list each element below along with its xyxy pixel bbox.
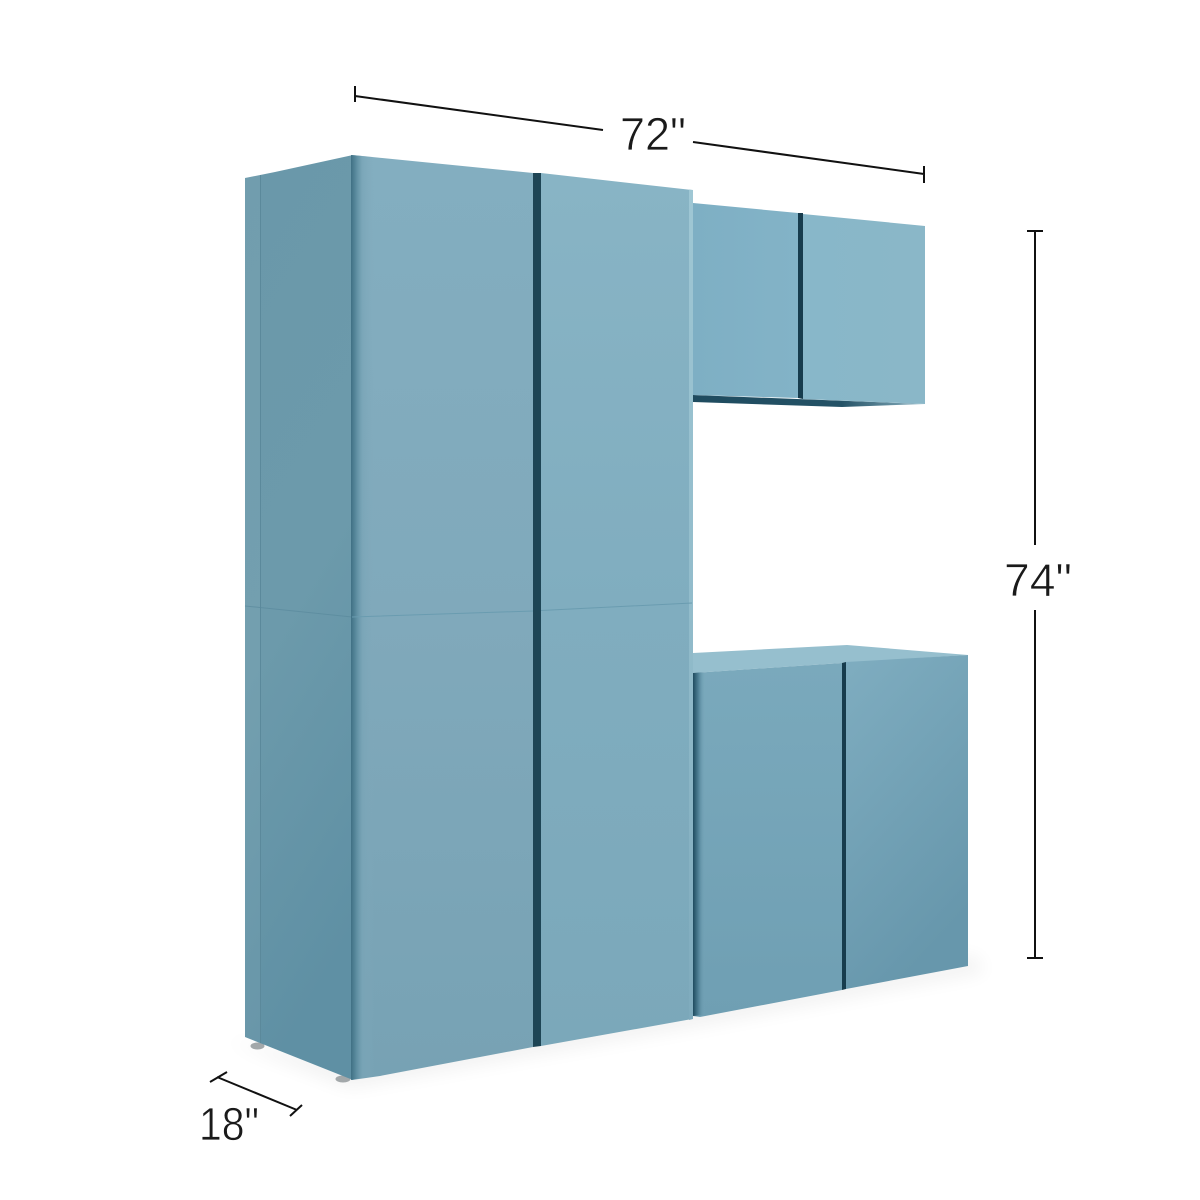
dimension: width 72 inches bbox=[355, 86, 924, 183]
leveling feet bbox=[250, 1042, 350, 1082]
tall door right bbox=[541, 173, 692, 1046]
dimension: depth 18 inches bbox=[199, 1072, 302, 1150]
dimension: height 74 inches: 74" bbox=[1004, 554, 1072, 606]
tall cabinet side panel bbox=[245, 155, 353, 1080]
cabinet set bbox=[245, 155, 968, 1082]
floor shadow bbox=[225, 955, 985, 1088]
dark gap between tall doors bbox=[533, 173, 541, 1047]
horizontal seam between stacked cabinets bbox=[352, 603, 692, 617]
tall door right light edge bbox=[689, 190, 693, 1020]
dimension: depth 18 inches: 18" bbox=[199, 1098, 259, 1150]
upper wall cabinet bbox=[693, 203, 925, 407]
lower base cabinet bbox=[693, 645, 968, 1017]
dimension: height 74 inches bbox=[1004, 231, 1072, 958]
dimension: width 72 inches: 72" bbox=[620, 108, 686, 160]
tall door left bbox=[351, 155, 533, 1080]
